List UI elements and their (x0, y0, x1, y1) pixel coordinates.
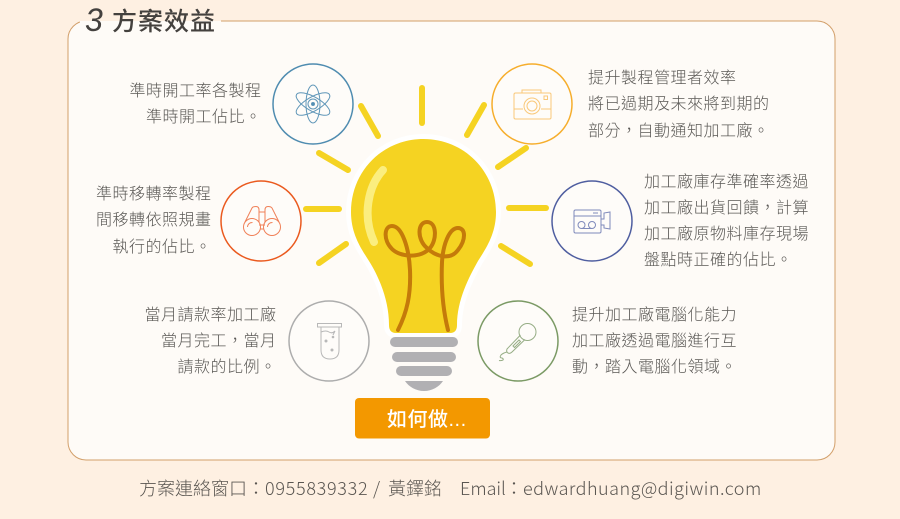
text: 製程管理者效率: 將已過期及未來將到期的 (588, 95, 770, 113)
icon: microphone (478, 301, 558, 381)
text: 當月請款率: 請款的比例。 (177, 358, 276, 376)
text: 準時開工率: 準時開工率各製程 (129, 82, 262, 100)
footer: contact line: edwardhuang@digiwin.com (523, 475, 762, 501)
text: 加工廠電腦化能力 (572, 305, 737, 376)
footer: contact line: 黃鐸銘 (388, 475, 442, 501)
text: 當月請款率: 當月請款率加工廠 (144, 305, 276, 324)
text: 準時移轉率: 執行的佔比。 (112, 238, 212, 256)
panel: benefits card (68, 21, 835, 460)
text: 準時移轉率 (96, 185, 212, 256)
button: 如何做: 如何做... (387, 408, 467, 431)
text: 當月請款率 (144, 305, 276, 376)
text: 加工廠電腦化能力: 加工廠透過電腦進行互 (572, 331, 737, 350)
text: 加工廠庫存準確率: 加工廠出貨回饋，計算 (644, 198, 809, 217)
heading: 3 方案效益: 方案效益 (112, 8, 216, 36)
text: 製程管理者效率 (588, 69, 770, 140)
icon: camera (492, 64, 572, 144)
icon: test tube (289, 301, 369, 381)
text: 製程管理者效率: 部分，自動通知加工廠。 (588, 121, 770, 140)
footer: contact line: ： (505, 475, 523, 501)
text: 加工廠庫存準確率 (644, 172, 809, 269)
text: 準時開工率: 準時開工佔比。 (146, 108, 262, 126)
heading: 3 方案效益 (80, 2, 221, 38)
heading: 3 方案效益: 3 (85, 2, 103, 38)
text: 準時移轉率: 準時移轉率製程 (96, 185, 212, 203)
icon: light bulb (351, 139, 496, 391)
text: 準時開工率 (129, 82, 262, 126)
button: 如何做 (355, 398, 490, 438)
footer: contact line: Email (460, 475, 506, 501)
footer: contact line: 0955839332 / (265, 475, 381, 501)
footer: contact line: 方案連絡窗口： (139, 475, 265, 501)
text: 加工廠電腦化能力: 提升加工廠電腦化能力 (572, 305, 737, 324)
icon: atom (273, 64, 353, 144)
text: 準時移轉率: 間移轉依照規畫 (96, 211, 212, 229)
icon: video camera (552, 181, 632, 261)
text: 當月請款率: 當月完工，當月 (161, 332, 276, 350)
text: 加工廠庫存準確率: 盤點時正確的佔比。 (644, 251, 793, 269)
text: 製程管理者效率: 提升製程管理者效率 (588, 69, 737, 87)
text: 加工廠電腦化能力: 動，踏入電腦化領域。 (572, 358, 737, 376)
text: 加工廠庫存準確率: 加工廠庫存準確率透過 (644, 172, 809, 191)
icon: light bulb rays (306, 88, 546, 264)
icon: binoculars (221, 181, 301, 261)
text: 加工廠庫存準確率: 加工廠原物料庫存現場 (644, 224, 809, 243)
